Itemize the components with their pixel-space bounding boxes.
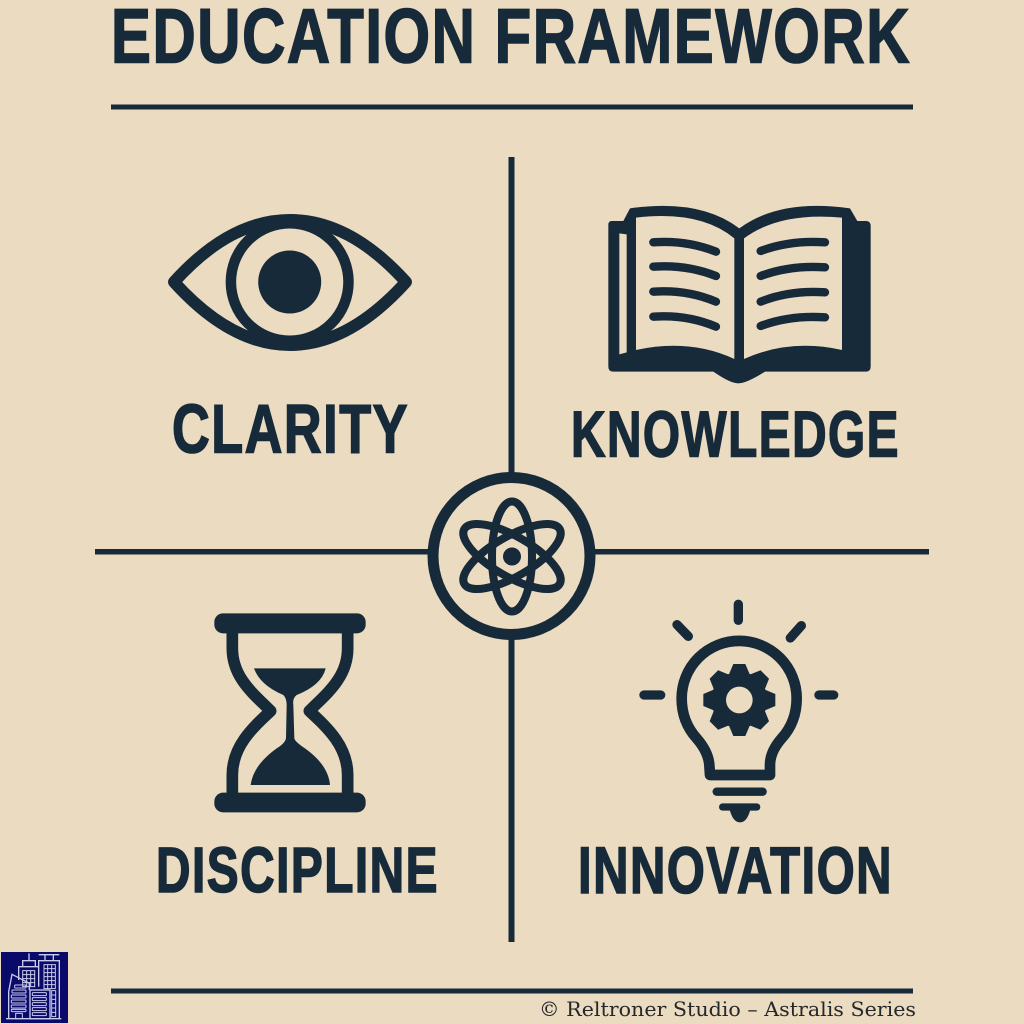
footer credit: © Reltroner Studio – Astralis Series [539, 998, 916, 1021]
icon: hourglass [214, 613, 366, 812]
icon: eye [174, 220, 406, 345]
panel: innovation [578, 604, 893, 907]
label: clarity: CLARITY [172, 390, 409, 468]
label: discipline: DISCIPLINE [156, 834, 439, 906]
panel: discipline [156, 613, 439, 906]
icon: light bulb with gear [644, 604, 834, 822]
panel: clarity [172, 220, 409, 468]
panel: knowledge [571, 206, 900, 470]
icon: open book [608, 206, 871, 383]
center emblem: atom [433, 478, 590, 634]
label: innovation: INNOVATION [578, 833, 893, 907]
logo: city buildings [1, 952, 68, 1023]
label: knowledge: KNOWLEDGE [571, 398, 900, 470]
quadrant divider lines [95, 157, 929, 942]
